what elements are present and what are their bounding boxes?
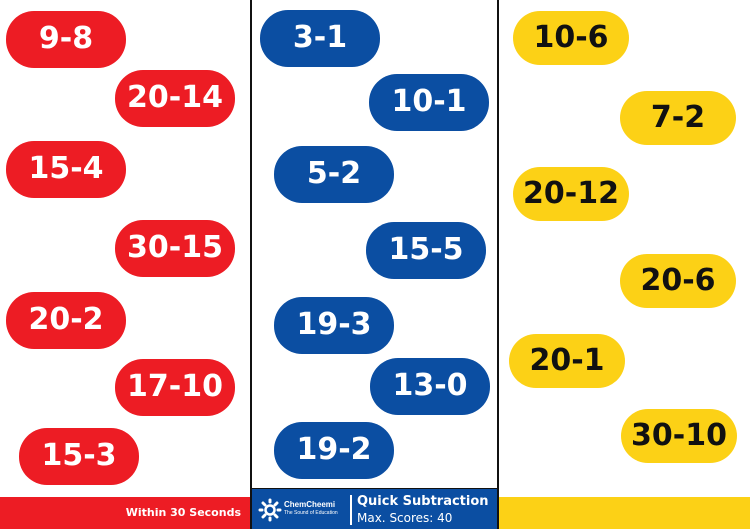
pill: 10-6 [513, 11, 629, 65]
pill: 15-5 [366, 222, 486, 279]
pill: 13-0 [370, 358, 490, 415]
pill: 7-2 [620, 91, 736, 145]
pill: 13-0: 13-0 [392, 368, 468, 403]
column divider left [250, 0, 252, 529]
pill: 10-1: 10-1 [391, 84, 467, 119]
pill: 20-6 [620, 254, 736, 308]
pill: 3-1 [260, 10, 380, 67]
pill: 10-6: 10-6 [533, 20, 609, 55]
pill: 20-12: 20-12 [523, 176, 619, 211]
footer: time limit: Within 30 Seconds [126, 506, 241, 519]
icon: ChemCheemi sun logo [258, 498, 282, 522]
pill: 15-5: 15-5 [388, 232, 464, 267]
footer: time limit [0, 497, 250, 529]
pill: 19-2 [274, 422, 394, 479]
pill: 15-4: 15-4 [28, 151, 104, 186]
pill: 19-3 [274, 297, 394, 354]
pill: 20-6: 20-6 [640, 263, 716, 298]
pill: 20-14: 20-14 [127, 80, 223, 115]
pill: 20-1 [509, 334, 625, 388]
pill: 9-8: 9-8 [39, 21, 93, 56]
pill: 19-3: 19-3 [296, 307, 372, 342]
pill: 20-1: 20-1 [529, 343, 605, 378]
pill: 17-10: 17-10 [127, 369, 223, 404]
divider [350, 495, 352, 525]
heading: Quick Subtraction: Quick Subtraction [357, 494, 489, 509]
pill: 17-10 [115, 359, 235, 416]
pill: 20-12 [513, 167, 629, 221]
pill: 20-2 [6, 292, 126, 349]
pill: 15-3: 15-3 [41, 438, 117, 473]
panel: blue subtraction column [252, 10, 497, 529]
footer: yellow bar [499, 497, 750, 529]
column divider right [497, 0, 499, 529]
pill: 20-14 [115, 70, 235, 127]
pill: 9-8 [6, 11, 126, 68]
pill: 30-10: 30-10 [631, 418, 727, 453]
footer: title block [252, 488, 497, 529]
pill: 5-2 [274, 146, 394, 203]
pill: 10-1 [369, 74, 489, 131]
pill: 3-1: 3-1 [293, 20, 347, 55]
pill: 15-4 [6, 141, 126, 198]
panel: red subtraction column [0, 11, 250, 529]
pill: 5-2: 5-2 [307, 156, 361, 191]
pill: 20-2: 20-2 [28, 302, 104, 337]
pill: 30-15: 30-15 [127, 230, 223, 265]
brand name: ChemCheemi [284, 500, 335, 509]
pill: 15-3 [19, 428, 139, 485]
pill: 30-10 [621, 409, 737, 463]
text: max scores: Max. Scores: 40 [357, 511, 452, 525]
panel: yellow subtraction column [499, 11, 750, 529]
pill: 19-2: 19-2 [296, 432, 372, 467]
pill: 7-2: 7-2 [651, 100, 705, 135]
brand tagline: The Sound of Education [284, 510, 338, 516]
pill: 30-15 [115, 220, 235, 277]
